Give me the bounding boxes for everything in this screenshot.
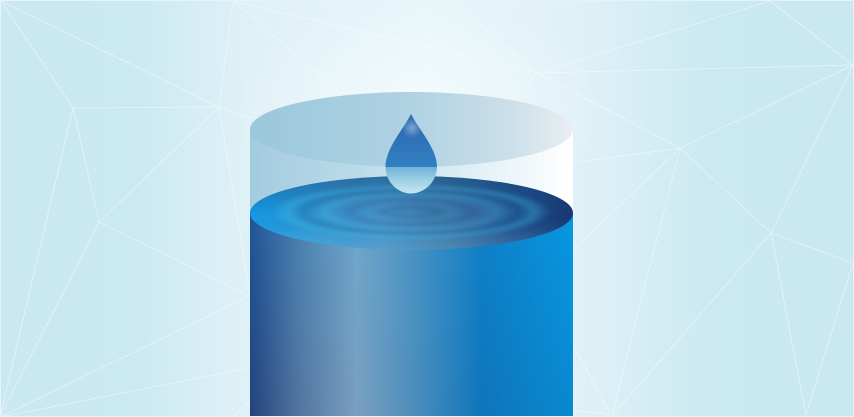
water surface [250, 176, 573, 250]
water column [250, 213, 573, 416]
glass rim ellipse [250, 92, 573, 167]
ripples [271, 184, 551, 240]
icon: water drop [386, 114, 437, 194]
glass wall [250, 129, 573, 219]
cylinder [250, 92, 573, 416]
